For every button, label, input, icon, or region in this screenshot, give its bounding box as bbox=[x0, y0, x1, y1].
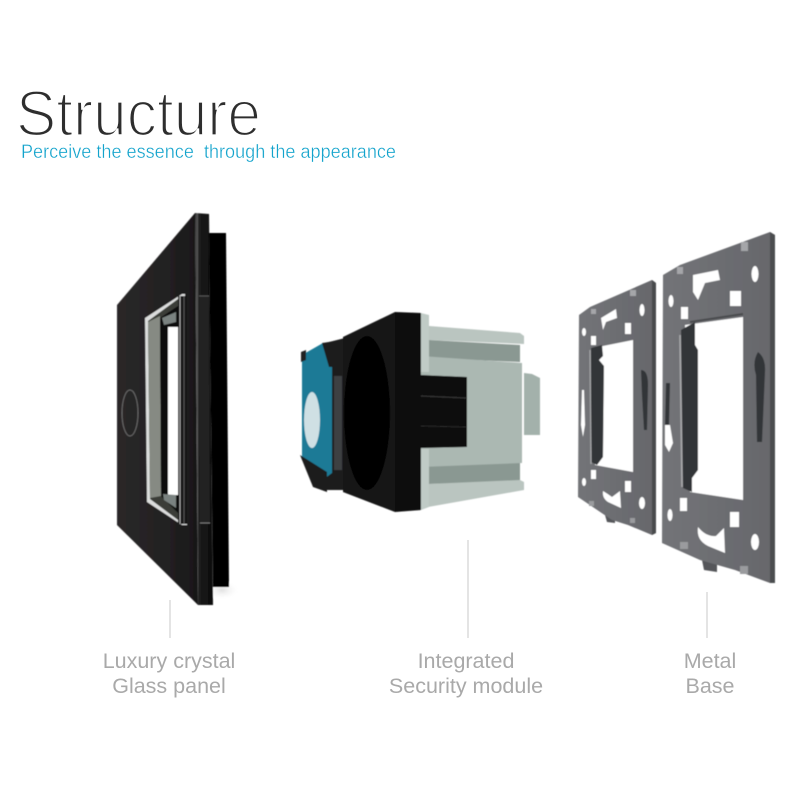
grey top rail bbox=[429, 326, 524, 344]
socket side bbox=[395, 312, 421, 512]
window interior bbox=[148, 299, 178, 520]
left base plate bbox=[578, 280, 656, 535]
grey main block bbox=[421, 356, 522, 467]
rear connector nub bbox=[524, 373, 540, 435]
subtitle: Perceive the essence through the appearance bbox=[21, 142, 396, 163]
grey flanges bbox=[421, 313, 429, 372]
security module illustration bbox=[300, 312, 540, 512]
label: metal base: Base bbox=[685, 674, 735, 698]
callout line: security module bbox=[467, 540, 469, 638]
dark spacer bbox=[325, 338, 345, 490]
label: glass panel: Glass panel bbox=[112, 674, 226, 698]
label: glass panel: Luxury crystal bbox=[103, 649, 235, 673]
label: security module: Integrated bbox=[418, 649, 514, 673]
right base plate bbox=[662, 232, 775, 583]
panel soft shadow bbox=[204, 580, 240, 600]
callout line: glass panel bbox=[169, 600, 171, 638]
black centre channel bbox=[421, 375, 467, 448]
glass edge bbox=[195, 213, 213, 605]
glass panel illustration bbox=[117, 213, 240, 605]
socket round recess bbox=[344, 336, 390, 490]
callout line: metal base bbox=[706, 592, 708, 638]
circuit board bbox=[302, 343, 332, 482]
touch button ring bbox=[122, 390, 138, 436]
label: metal base: Metal bbox=[684, 649, 736, 673]
grey bottom rail bbox=[429, 462, 520, 484]
label: security module: Security module bbox=[389, 674, 543, 698]
metal base plates illustration bbox=[578, 232, 775, 583]
title: Structure bbox=[16, 78, 261, 150]
board standoffs bbox=[322, 340, 343, 367]
socket face bbox=[343, 312, 395, 512]
back plate bbox=[209, 233, 229, 587]
chrome window frame bbox=[145, 294, 187, 525]
glass front face bbox=[117, 213, 198, 605]
board white label bbox=[304, 392, 320, 448]
